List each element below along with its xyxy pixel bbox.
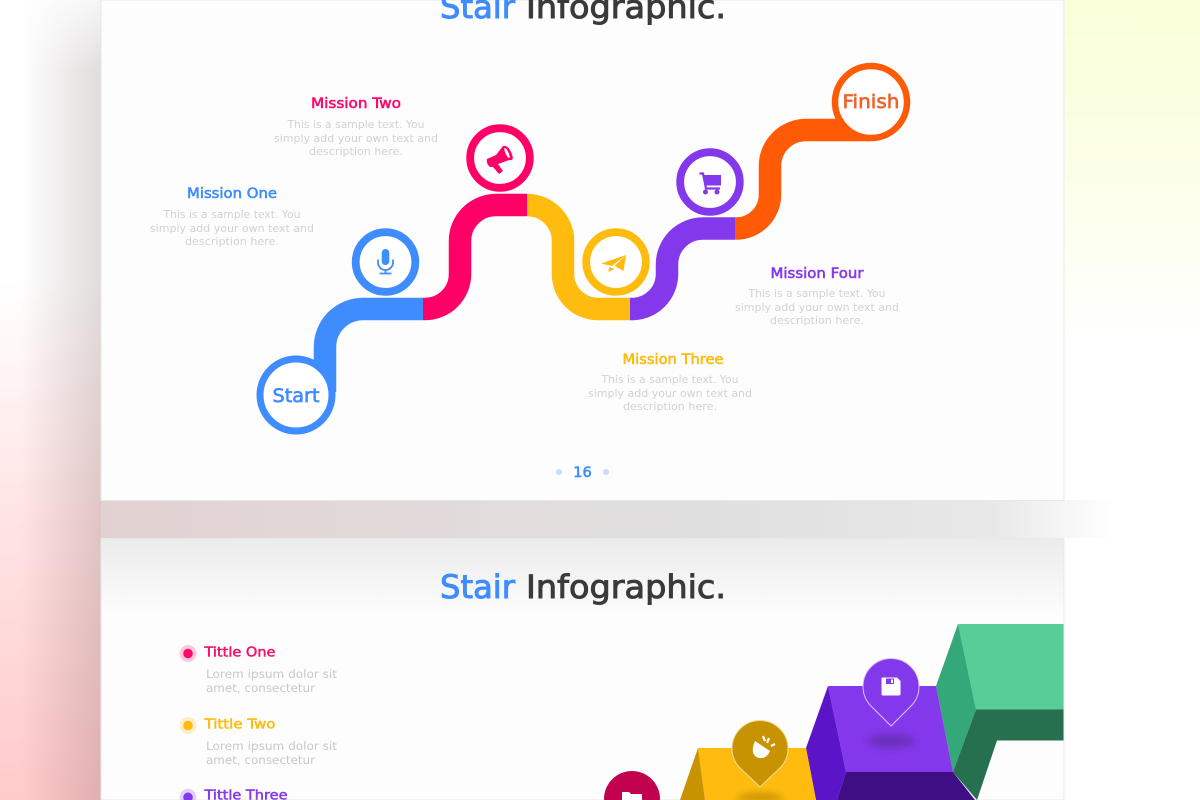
3D stair: green step [936,624,1064,800]
panel: top slide [101,0,1064,500]
list item: Tittle Two [180,716,338,767]
stair path [325,130,870,392]
text block: Mission Three: simply add your own text and [588,387,752,400]
title: top slide [440,0,726,26]
3D stair: yellow step [680,748,816,800]
text block: Mission Two [274,96,438,158]
path segment: blue [325,309,423,392]
text block: Mission Four [735,266,899,327]
text block: Mission Three: description here. [623,400,717,413]
icon: megaphone [470,128,530,188]
text block: Mission Three: Mission Three [622,352,724,368]
list item: Tittle Two: Lorem ipsum dolor sit [206,739,338,753]
icon: paper plane [586,232,646,292]
text block: Mission Four: Mission Four [770,266,864,282]
path segment: purple [630,228,735,309]
text block: Mission Three [588,352,752,413]
title: bottom slide [440,568,726,606]
title: bottom slide: Infographic. [526,568,726,606]
start node: Start [272,385,320,407]
path segment: yellow [527,205,630,309]
text block: Mission Four: description here. [770,314,864,327]
finish node [835,66,907,138]
text block: Mission One: Mission One [187,186,277,202]
text block: Mission Four: simply add your own text and [735,301,899,314]
path segment: pink [423,205,527,309]
finish node: Finish [842,91,900,113]
title: bottom slide: Stair [440,568,516,606]
icon: cart [680,152,740,212]
page number: 16 [573,465,592,481]
panel: bottom slide [101,538,1064,800]
list item: Tittle Two: amet, consectetur [206,753,315,767]
list item: Tittle One: amet, consectetur [206,681,315,695]
page number [556,465,609,481]
list item: Tittle One: Lorem ipsum dolor sit [206,667,338,681]
pin: yellow bulb icon [732,720,788,787]
text block: Mission One: description here. [185,235,279,248]
list item: Tittle Two: Tittle Two [203,716,276,732]
text block: Mission Two: simply add your own text and [274,132,438,145]
list item: Tittle One [180,644,338,695]
pin: purple save icon [863,658,919,726]
3D stair: purple step [806,686,975,800]
text block: Mission Two: Mission Two [311,96,401,112]
text block: Mission Two: This is a sample text. You [287,118,424,131]
pin: pink folder icon [604,771,660,800]
icon: microphone [356,232,415,292]
list item: Tittle One: Tittle One [203,644,276,660]
text block: Mission One: This is a sample text. You [163,208,300,221]
text block: Mission One [150,186,314,248]
text block: Mission Three: This is a sample text. You [601,373,738,386]
text block: Mission Four: This is a sample text. You [748,287,886,300]
path segment: orange [735,130,870,228]
text block: Mission Two: description here. [309,145,403,158]
text block: Mission One: simply add your own text and [150,222,314,235]
start node [260,359,332,431]
